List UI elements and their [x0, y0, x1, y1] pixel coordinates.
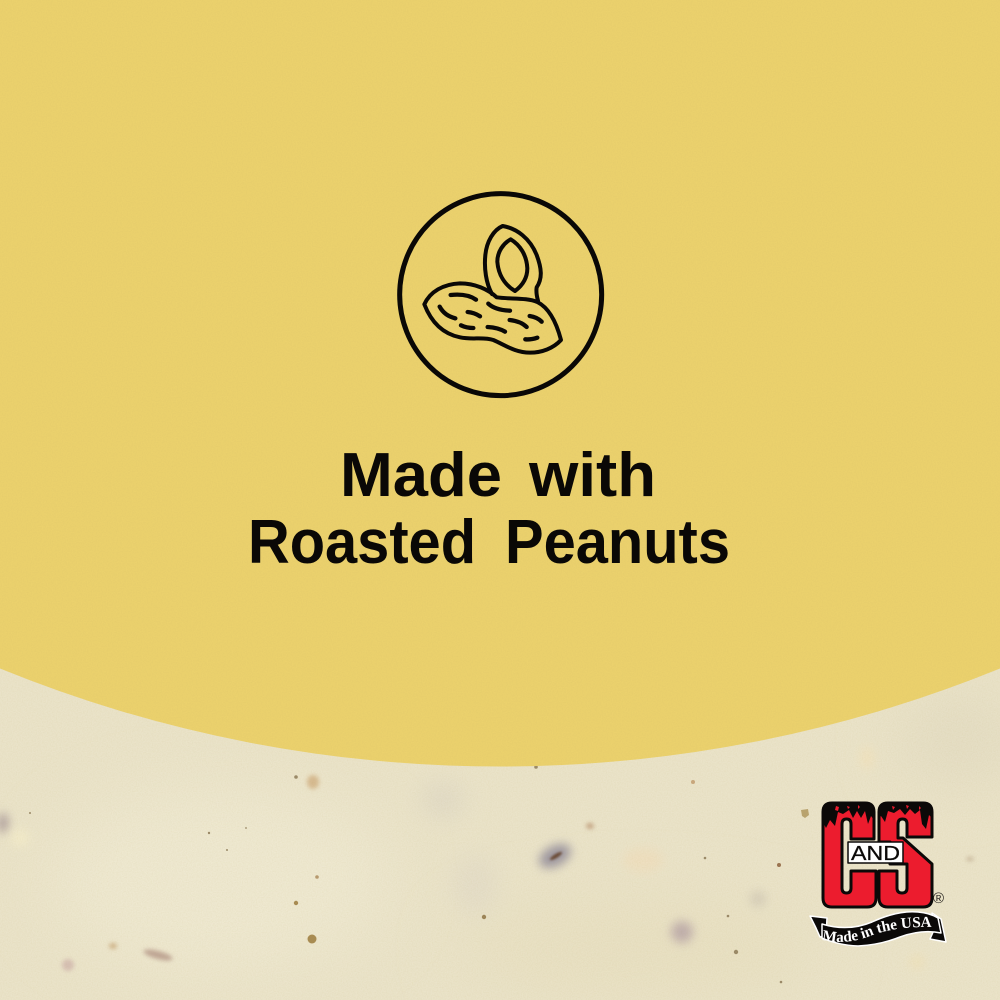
letter S [879, 803, 932, 907]
yellow arc panel [0, 0, 1000, 767]
peanut shell [424, 283, 561, 353]
heading line 1: Made [340, 441, 502, 510]
heading line 2: Roasted [248, 508, 476, 577]
heading line 1: with [528, 441, 656, 510]
banner text: Made in the USA [822, 916, 932, 942]
logo letters [823, 803, 932, 907]
icon: peanut in circle [400, 194, 602, 396]
heading line 1 [340, 441, 656, 510]
letter C [823, 803, 876, 907]
AND text: AND [851, 843, 900, 865]
heading [248, 441, 730, 577]
charred top speckles [835, 805, 921, 811]
heading line 2 [248, 508, 730, 577]
heading line 2: Peanuts [505, 508, 730, 577]
banner [810, 912, 946, 946]
logo: C and S, Made in the USA [809, 802, 947, 947]
peanut kernel [485, 226, 541, 301]
registered mark: ® [933, 890, 944, 907]
AND box [848, 842, 903, 863]
icon ring [400, 194, 602, 396]
peanut shell dashes [440, 295, 542, 339]
charred tops [823, 803, 932, 829]
